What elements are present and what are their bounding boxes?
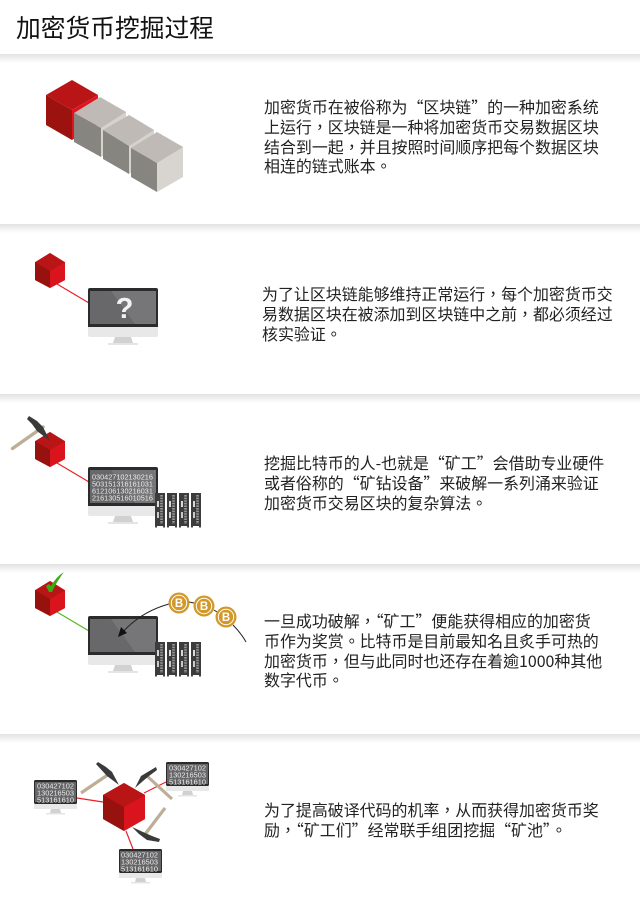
pickaxe, cube, monitor and servers: 216130516010516 xyxy=(92,494,153,502)
text: mining pool: 为了提高破译代码的机率，从而获得加密货币奖 xyxy=(264,797,599,821)
text: miners: 或者俗称的“矿钻设备”来破解一系列涌来验证 xyxy=(264,470,599,494)
text: blockchain: 上运行，区块链是一种将加密货币交易数据区块 xyxy=(264,114,599,138)
text: blockchain xyxy=(264,94,599,177)
panel: verification xyxy=(35,253,613,345)
pickaxe, cube, monitor and servers: 503151316161031 xyxy=(92,480,153,488)
pickaxe, cube, monitor and servers xyxy=(10,416,201,528)
large cube, three monitors and pickaxes: 130216503 xyxy=(169,770,206,780)
text: verification: 核实验证。 xyxy=(262,321,342,345)
text: blockchain: 加密货币在被俗称为“区块链”的一种加密系统 xyxy=(264,94,599,118)
text: verification xyxy=(262,281,613,345)
large cube, three monitors and pickaxes: 030427102 xyxy=(37,782,74,790)
text: mining pool: 励，“矿工们”经常联手组团挖掘“矿池”。 xyxy=(264,817,567,841)
text: reward xyxy=(264,608,602,691)
text: reward: 一旦成功破解，“矿工”便能获得相应的加密货 xyxy=(264,608,591,632)
large cube, three monitors and pickaxes: 030427102 xyxy=(169,764,206,772)
panel: miners xyxy=(10,416,604,528)
text: miners xyxy=(264,450,604,514)
pickaxe, cube, monitor and servers: 030427102130216 xyxy=(92,472,153,482)
panel: reward xyxy=(35,572,602,691)
text: verification: 为了让区块链能够维持正常运行，每个加密货币交 xyxy=(262,281,613,305)
title: 加密货币挖掘过程 xyxy=(16,9,214,45)
verified cube, monitor, servers and coins xyxy=(35,572,246,676)
panel: blockchain xyxy=(46,80,599,192)
text: reward: 币作为奖赏。比特币是目前最知名且炙手可热的 xyxy=(264,628,599,652)
text: miners: 加密货币交易区块的复杂算法。 xyxy=(264,490,487,514)
large cube, three monitors and pickaxes: 513161610 xyxy=(121,864,158,874)
text: blockchain: 结合到一起，并且按照时间顺序把每个数据区块 xyxy=(264,134,599,158)
chain of four cubes xyxy=(46,80,183,192)
text: verification: 易数据区块在被添加到区块链中之前，都必须经过 xyxy=(262,301,613,325)
large cube, three monitors and pickaxes: 030427102 xyxy=(121,850,158,860)
large cube, three monitors and pickaxes: 513161610 xyxy=(37,796,74,804)
pickaxe, cube, monitor and servers: 612106130216031 xyxy=(92,486,153,496)
text: mining pool xyxy=(264,797,599,841)
text: reward: 数字代币。 xyxy=(264,667,344,691)
cube and monitor with question mark xyxy=(35,253,158,345)
large cube, three monitors and pickaxes: 513161610 xyxy=(169,778,206,786)
large cube, three monitors and pickaxes: 130216503 xyxy=(37,788,74,798)
text: miners: 挖掘比特币的人-也就是“矿工”会借助专业硬件 xyxy=(264,450,604,474)
text: blockchain: 相连的链式账本。 xyxy=(264,153,392,177)
large cube, three monitors and pickaxes: 130216503 xyxy=(121,858,158,866)
large cube, three monitors and pickaxes xyxy=(34,762,209,884)
panel: mining pool xyxy=(34,762,599,884)
text: reward: 加密货币，但与此同时也还存在着逾1000种其他 xyxy=(264,648,602,672)
cube and monitor with question mark: ? xyxy=(116,293,133,325)
